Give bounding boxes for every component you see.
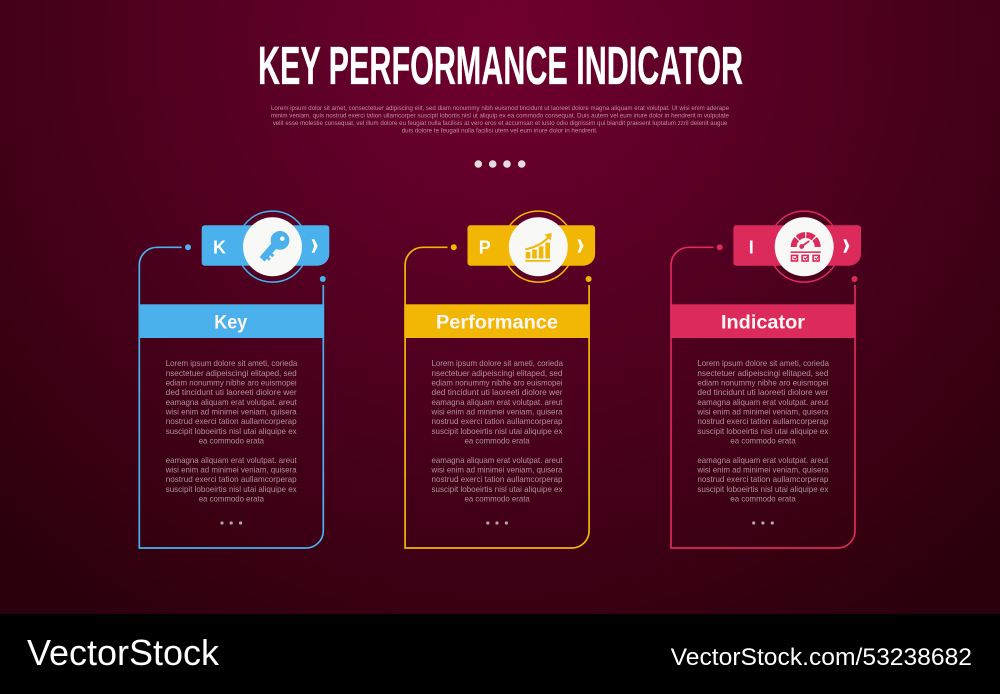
chevron — [312, 239, 318, 253]
body text: Lorem ipsum dolore sit ameti, corieda — [431, 359, 564, 368]
body text: suscipit loboeirtis nisl utai aliquipe ex — [697, 427, 828, 436]
tag letter: I — [749, 237, 754, 257]
body text: nsectetuer adipeiscingi elitaped, sed — [166, 369, 297, 378]
body text: ediam nonummy nibhe aro euismopei — [166, 379, 297, 388]
header label: Indicator — [721, 312, 806, 333]
footer bar — [0, 614, 1000, 694]
body text: eamagna aliquam erat volutpat. areut — [166, 398, 297, 407]
ellipsis dots — [752, 521, 774, 525]
body text: eamagna aliquam erat volutpat. areut — [431, 398, 563, 407]
body text: Lorem ipsum dolore sit ameti, corieda — [166, 359, 298, 368]
ellipsis dots — [220, 521, 242, 525]
body text: nostrud exerci tation aullamcorperap — [166, 475, 297, 484]
header bar — [404, 304, 590, 338]
body text: eamagna aliquam erat volutpat. areut — [431, 456, 563, 465]
body text: nostrud exerci tation aullamcorperap — [697, 417, 829, 426]
connector dots — [185, 244, 326, 282]
panel frame outline — [405, 247, 589, 548]
body text: nostrud exerci tation aullamcorperap — [697, 475, 829, 484]
icon: growth chart — [525, 233, 552, 262]
panel: Performance — [404, 211, 595, 548]
header label: Performance — [436, 312, 558, 333]
body text: nsectetuer adipeiscingi elitaped, sed — [697, 369, 829, 378]
body text: nostrud exerci tation aullamcorperap — [166, 417, 297, 426]
icon ring — [237, 211, 308, 282]
body text: suscipit loboeirtis nisl utai aliquipe ex — [697, 485, 828, 494]
icon ring — [503, 211, 574, 282]
body text: suscipit loboeirtis nisl utai aliquipe ex — [166, 427, 297, 436]
icon circle — [509, 217, 568, 276]
body text: wisi enim ad minimei veniam, quisera — [696, 408, 829, 417]
chevron — [578, 239, 584, 253]
letter tag — [733, 225, 861, 266]
body text: suscipit loboeirtis nisl utai aliquipe ex — [166, 485, 297, 494]
body text: Lorem ipsum dolore sit ameti, corieda — [697, 359, 829, 368]
panel: Key — [138, 211, 329, 548]
body text: suscipit loboeirtis nisl utai aliquipe ex — [431, 485, 562, 494]
header bar — [670, 304, 856, 338]
intro paragraph: minim veniam, quis nostrud exerci tation ullamcorper suscipit lobortis nisl ut aliquip ex ea commodo consequat. Duis autem vel eum iriure dolor in hendrerit in vulputate — [271, 112, 729, 120]
footer url: VectorStock.com/53238682 — [671, 644, 972, 671]
body text: ded tincidunt uti laoreeti diolore wer — [166, 388, 297, 397]
body text: eamagna aliquam erat volutpat. areut — [697, 456, 829, 465]
header bar — [138, 304, 324, 338]
body text: wisi enim ad minimei veniam, quisera — [165, 466, 297, 474]
body text: nostrud exerci tation aullamcorperap — [431, 417, 563, 426]
body text: eamagna aliquam erat volutpat. areut — [697, 398, 829, 407]
body text — [696, 359, 829, 504]
intro paragraph: Lorem ipsum dolor sit amet, consectetuer adipiscing elit, sed diam nonummy nibh euismod tincidunt ut laoreet dolore magna aliquam erat volutpat. Ut wisi enim aderape — [271, 105, 729, 112]
body text: ded tincidunt uti laoreeti diolore wer — [431, 388, 563, 397]
pagination dots — [474, 160, 526, 168]
body text: wisi enim ad minimei veniam, quisera — [165, 408, 297, 417]
panel frame outline — [139, 247, 323, 548]
tag letter: P — [479, 237, 491, 257]
ellipsis dots — [486, 521, 508, 525]
panel: Indicator — [670, 211, 861, 548]
body text: nsectetuer adipeiscingi elitaped, sed — [431, 369, 563, 378]
footer logo: VectorStock — [27, 632, 220, 673]
icon ring — [769, 211, 840, 282]
connector dots — [451, 244, 592, 282]
body text: ea commodo erata — [464, 437, 530, 446]
body text — [165, 359, 298, 504]
body text: ea commodo erata — [199, 437, 264, 446]
body text: wisi enim ad minimei veniam, quisera — [431, 466, 563, 474]
letter tag — [202, 225, 329, 266]
icon: gauge with checkboxes — [791, 235, 821, 261]
chevron — [843, 239, 849, 253]
icon: key — [260, 231, 289, 262]
intro paragraph: velit esse molestie consequat, vel illum dolore eu feugiat nulla facilisis at vero eros et accumsan et iusto odio dignissim qui blandit praesent luptatum zzril delenit augue — [273, 120, 728, 127]
body text: eamagna aliquam erat volutpat. areut — [166, 456, 297, 465]
panel frame outline — [671, 247, 855, 548]
body text: ediam nonummy nibhe aro euismopei — [697, 379, 829, 388]
body text: ea commodo erata — [730, 494, 796, 504]
body text — [431, 359, 564, 504]
body text: suscipit loboeirtis nisl utai aliquipe ex — [431, 427, 562, 436]
tag letter: K — [213, 237, 226, 257]
body text: wisi enim ad minimei veniam, quisera — [431, 408, 563, 417]
body text: ded tincidunt uti laoreeti diolore wer — [697, 388, 829, 397]
connector dots — [717, 244, 858, 282]
icon circle — [775, 217, 834, 276]
letter tag — [468, 225, 595, 266]
body text: ea commodo erata — [730, 437, 796, 446]
body text: nostrud exerci tation aullamcorperap — [431, 475, 563, 484]
body text: ea commodo erata — [464, 494, 530, 504]
body text: wisi enim ad minimei veniam, quisera — [696, 466, 829, 474]
body text: ea commodo erata — [199, 494, 264, 504]
header label: Key — [214, 312, 248, 333]
intro paragraph: duis dolore te feugait nulla facilisi utem vel eum iriure dolor in hendrerit. — [402, 127, 598, 134]
icon circle — [243, 217, 302, 276]
body text: ediam nonummy nibhe aro euismopei — [431, 379, 563, 388]
intro paragraph — [271, 105, 729, 134]
